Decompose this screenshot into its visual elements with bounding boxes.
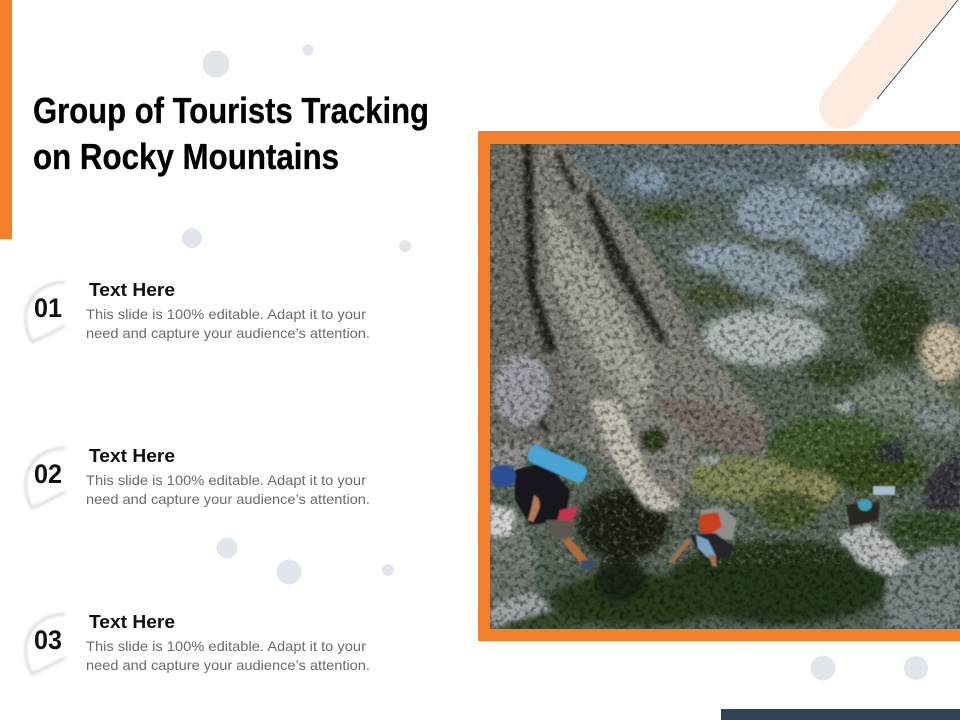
number badge 03: 03 (34, 625, 62, 655)
body text 01: need and capture your audience’s attention. (86, 325, 370, 341)
number badge 02: 02 (34, 459, 62, 489)
number badge 02 (26, 448, 65, 508)
title: on Rocky Mountains (33, 136, 339, 177)
body text 03: need and capture your audience’s attention. (86, 657, 370, 673)
photo: hikers on rocky mountain (490, 140, 960, 632)
hiker with blue sleeping roll (490, 443, 595, 569)
decorative dots (182, 44, 928, 680)
heading 02: Text Here (89, 446, 175, 466)
bottom navy bar (721, 709, 960, 720)
distant hiker (846, 486, 895, 526)
texture overlays (490, 144, 960, 629)
title (33, 90, 429, 177)
photo frame (478, 131, 960, 641)
hiker with red backpack (668, 507, 737, 567)
body text 01 (86, 306, 370, 341)
item 01 (26, 280, 370, 342)
left orange accent bar (0, 0, 12, 239)
number badge 03 (26, 614, 65, 674)
item 02 (26, 446, 370, 508)
heading 01: Text Here (89, 280, 175, 300)
body text 03: This slide is 100% editable. Adapt it to your (86, 638, 366, 654)
number badge 01 (26, 282, 65, 342)
body text 02 (86, 472, 370, 507)
big left rock face (490, 144, 768, 513)
body text 03 (86, 638, 370, 673)
item 03 (26, 612, 370, 674)
decorative peach stripe with thin line (841, 0, 958, 107)
title: Group of Tourists Tracking (33, 90, 429, 131)
heading 03: Text Here (89, 612, 175, 632)
body text 02: This slide is 100% editable. Adapt it to your (86, 472, 366, 488)
upper slope colour masses (562, 144, 960, 262)
foreground boulders (490, 402, 960, 629)
body text 02: need and capture your audience’s attention. (86, 491, 370, 507)
body text 01: This slide is 100% editable. Adapt it to your (86, 306, 366, 322)
number badge 01: 01 (34, 293, 62, 323)
